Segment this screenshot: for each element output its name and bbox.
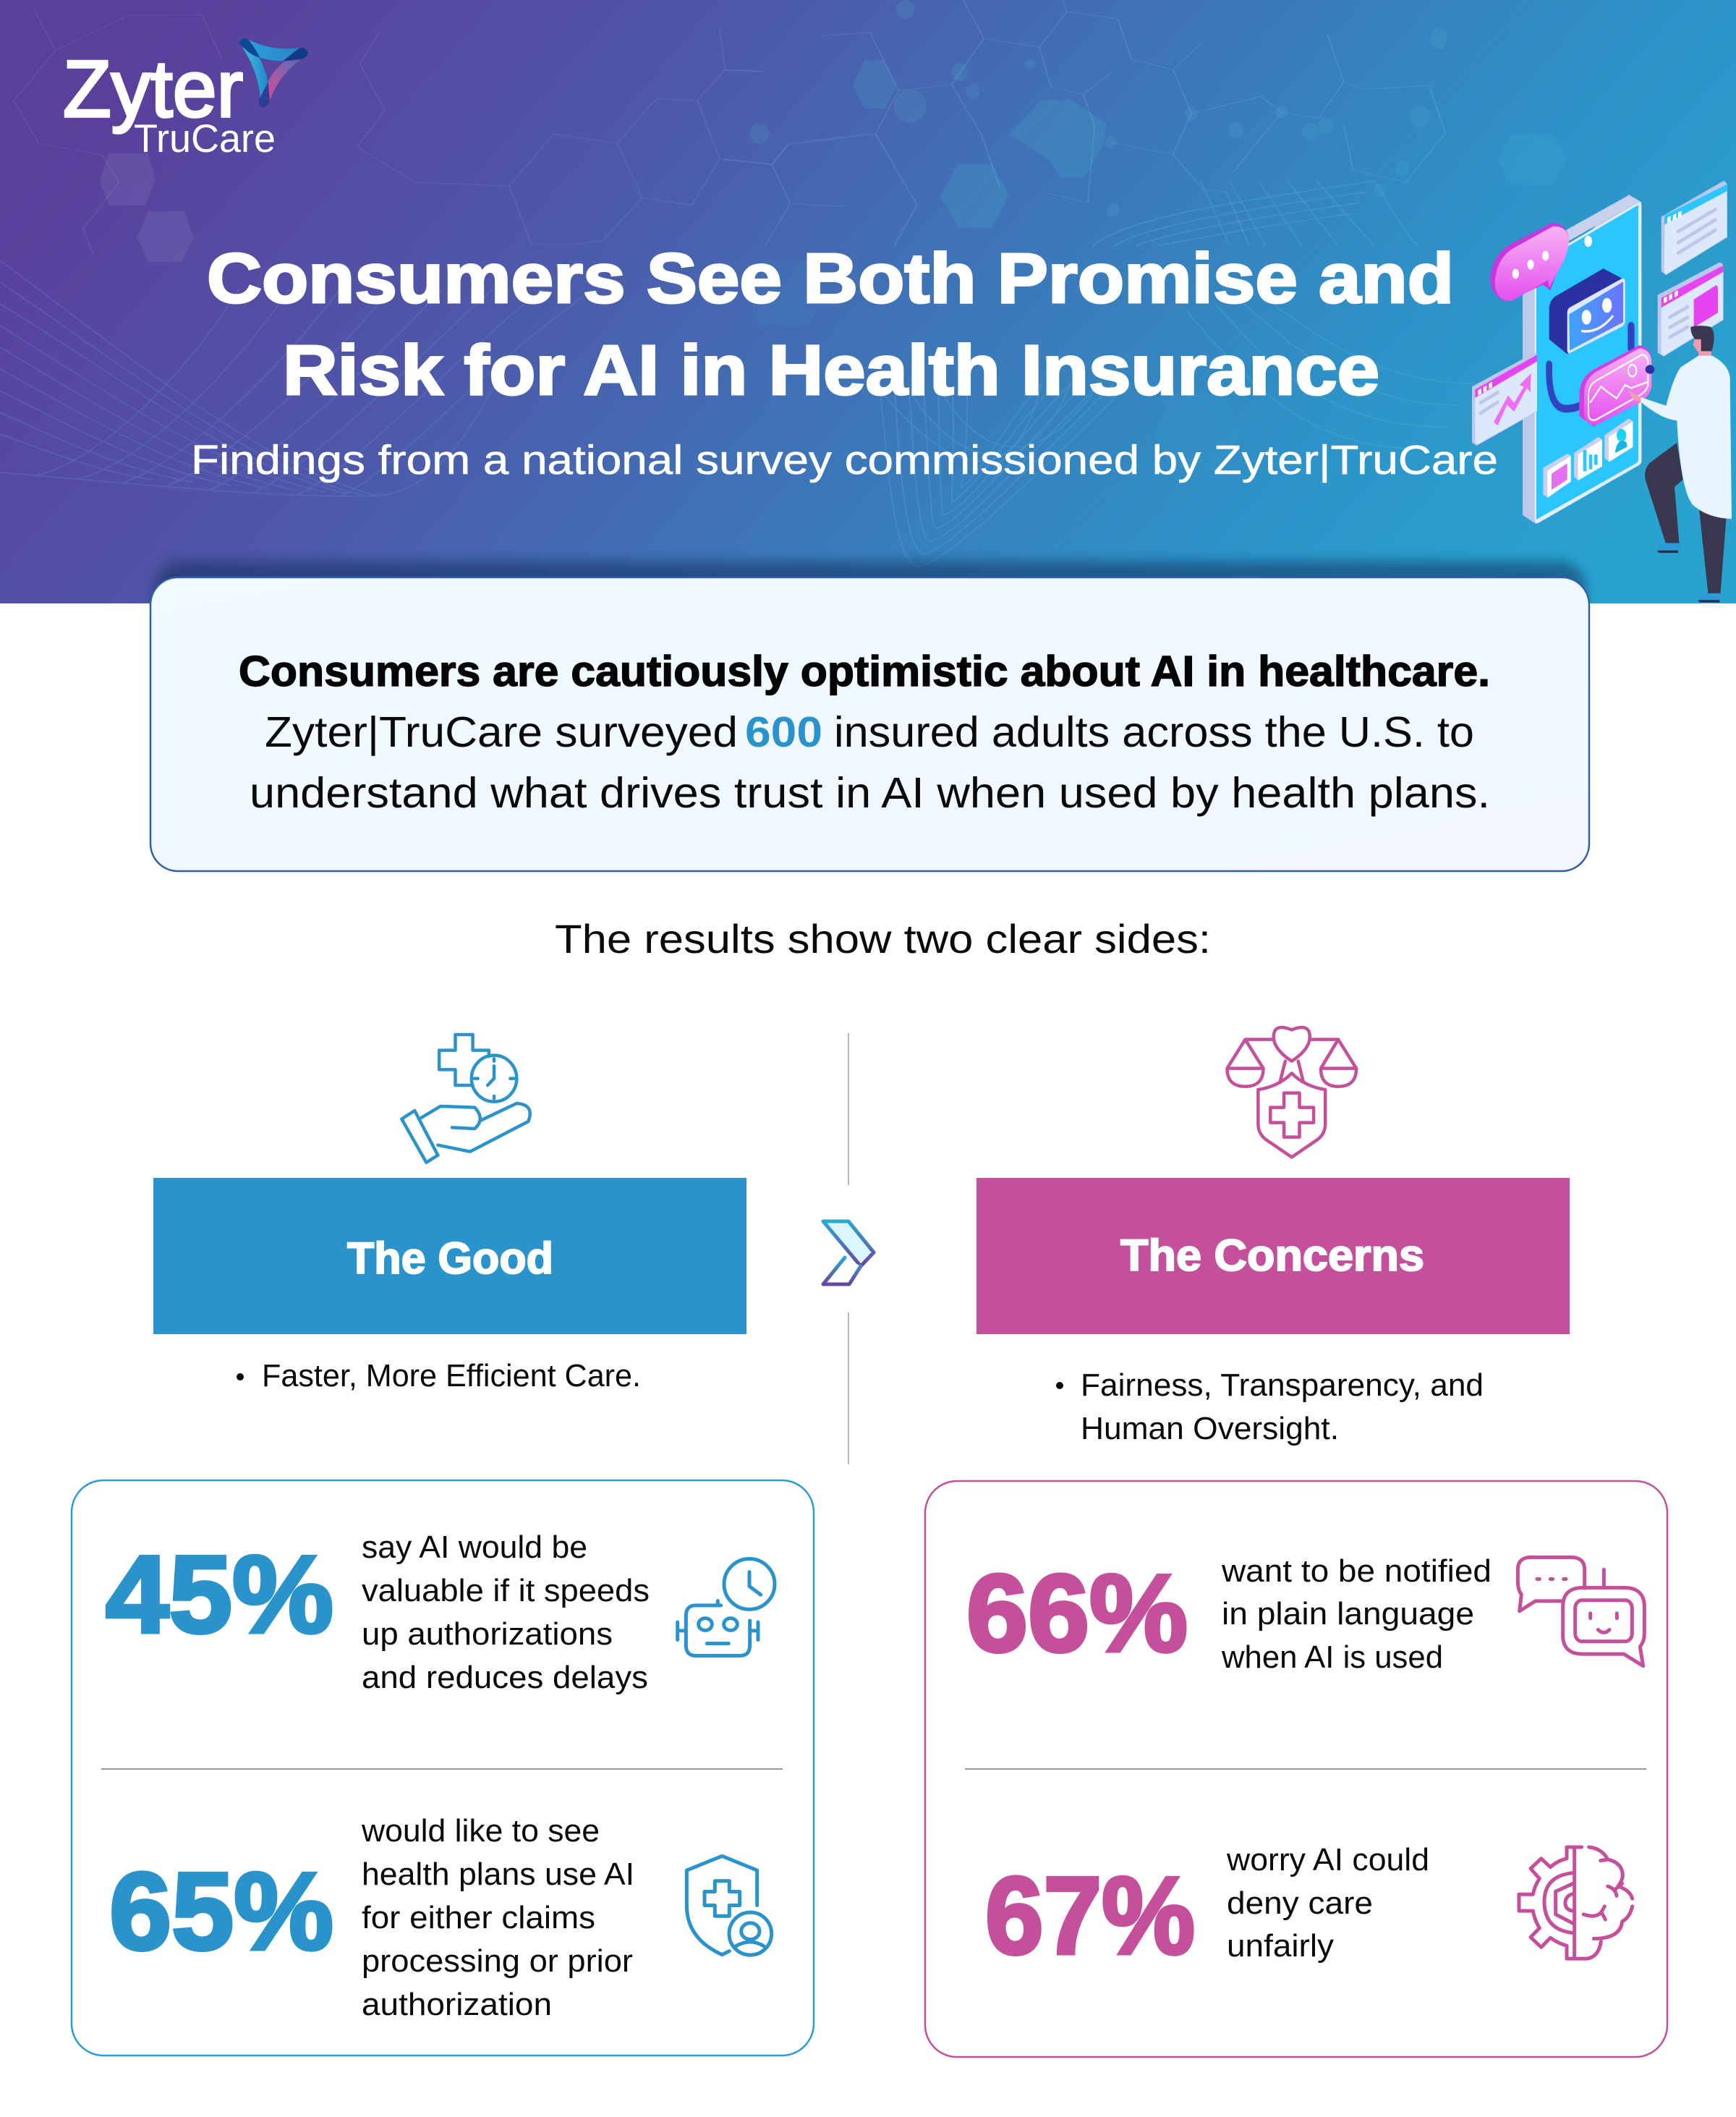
stat 66%: when AI is used [1221, 1639, 1443, 1675]
title: Consumers See Both Promise and [207, 239, 1454, 318]
robot head [1549, 268, 1625, 354]
stat 65%: health plans use AI [362, 1857, 634, 1892]
icon: shield with cross and person [686, 1856, 772, 1955]
logo symbol [239, 38, 308, 107]
bullet: concerns: Fairness, Transparency, and [1081, 1367, 1484, 1403]
decorative wave mesh left [0, 260, 593, 496]
panel: good stats [72, 1480, 814, 2056]
stat 65%: would like to see [361, 1813, 600, 1849]
banner: The Concerns [977, 1178, 1570, 1334]
doctor hand [1628, 390, 1641, 402]
intro text: Zyter|TruCare surveyed [265, 708, 738, 756]
decorative hexagons [100, 153, 194, 262]
stat 65%: for either claims [362, 1900, 595, 1935]
center divider [848, 1033, 849, 1464]
bullet: concerns [1056, 1367, 1484, 1446]
doctor legs [1645, 443, 1683, 545]
intro text: insured adults across the U.S. to [834, 708, 1474, 756]
stat 66%: 66% [966, 1552, 1188, 1675]
panel: concerns stats [925, 1481, 1667, 2057]
icon: hand with medical cross and clock [401, 1035, 530, 1163]
icon: half gear half brain [1519, 1847, 1633, 1959]
logo [63, 38, 308, 161]
banner: The Good [153, 1178, 746, 1334]
stat 66%: want to be notified [1221, 1553, 1492, 1589]
banner: The Concerns: The Concerns [1120, 1231, 1424, 1280]
logo wordmark Zyter: Zyter [63, 44, 243, 134]
subtitle: Findings from a national survey commissioned by Zyter|TruCare [191, 437, 1498, 483]
app tiles [1543, 418, 1633, 498]
stat 66%: in plain language [1222, 1596, 1474, 1632]
icon: robot with clock [678, 1559, 775, 1655]
image card [1579, 345, 1654, 426]
doctor head [1693, 336, 1711, 355]
stat 67%: unfairly [1227, 1928, 1334, 1964]
banner: The Good: The Good [347, 1234, 553, 1283]
arrow chevron [823, 1221, 874, 1284]
bullet: good: Faster, More Efficient Care. [262, 1358, 641, 1393]
stat 65%: processing or prior [362, 1943, 633, 1979]
stat 45%: valuable if it speeds [362, 1573, 650, 1608]
stat 67% [985, 1842, 1429, 1977]
header banner [0, 0, 1736, 603]
icon: chat bubbles with robot [1518, 1557, 1644, 1666]
stat 65%: authorization [362, 1987, 552, 2022]
stat 45%: up authorizations [362, 1616, 613, 1652]
left chart window [1472, 352, 1537, 446]
decorative molecule lines left [14, 8, 868, 256]
stat 66% [966, 1552, 1492, 1675]
doctor coat [1641, 355, 1732, 519]
stat 67%: 67% [985, 1854, 1195, 1977]
phone [1523, 195, 1641, 524]
decorative wave mesh center [880, 181, 1476, 566]
robot cords [1549, 326, 1631, 409]
intro card [150, 561, 1589, 871]
stat 67%: deny care [1227, 1885, 1373, 1921]
doctor [1628, 326, 1732, 603]
stat 65%: 65% [109, 1850, 333, 1973]
intro text: understand what drives trust in AI when used by health plans. [250, 769, 1490, 817]
intro headline: Consumers are cautiously optimistic about AI in healthcare. [239, 648, 1490, 695]
doctor shoes [1658, 543, 1720, 601]
title [207, 239, 1454, 410]
stat 65% [109, 1813, 634, 2022]
chat bubble [1490, 223, 1569, 302]
stat 45%: and reduces delays [362, 1660, 648, 1695]
section lead-in: The results show two clear sides: [555, 916, 1211, 962]
logo wordmark TruCare: TruCare [134, 116, 276, 161]
intro text [250, 708, 1490, 817]
bullet: concerns: Human Oversight. [1081, 1411, 1339, 1446]
decorative molecule lines right [723, 0, 1447, 246]
stat 45%: 45% [106, 1533, 333, 1656]
stat 45%: say AI would be [362, 1530, 587, 1565]
right windows [1658, 181, 1727, 357]
intro text: 600 [745, 708, 822, 756]
icon: scales, heart and shield [1227, 1027, 1356, 1157]
illustration: phone with robot and doctor [1472, 181, 1732, 603]
title: Risk for AI in Health Insurance [283, 331, 1379, 410]
stat 67%: worry AI could [1226, 1842, 1429, 1878]
stat 45% [106, 1530, 650, 1695]
